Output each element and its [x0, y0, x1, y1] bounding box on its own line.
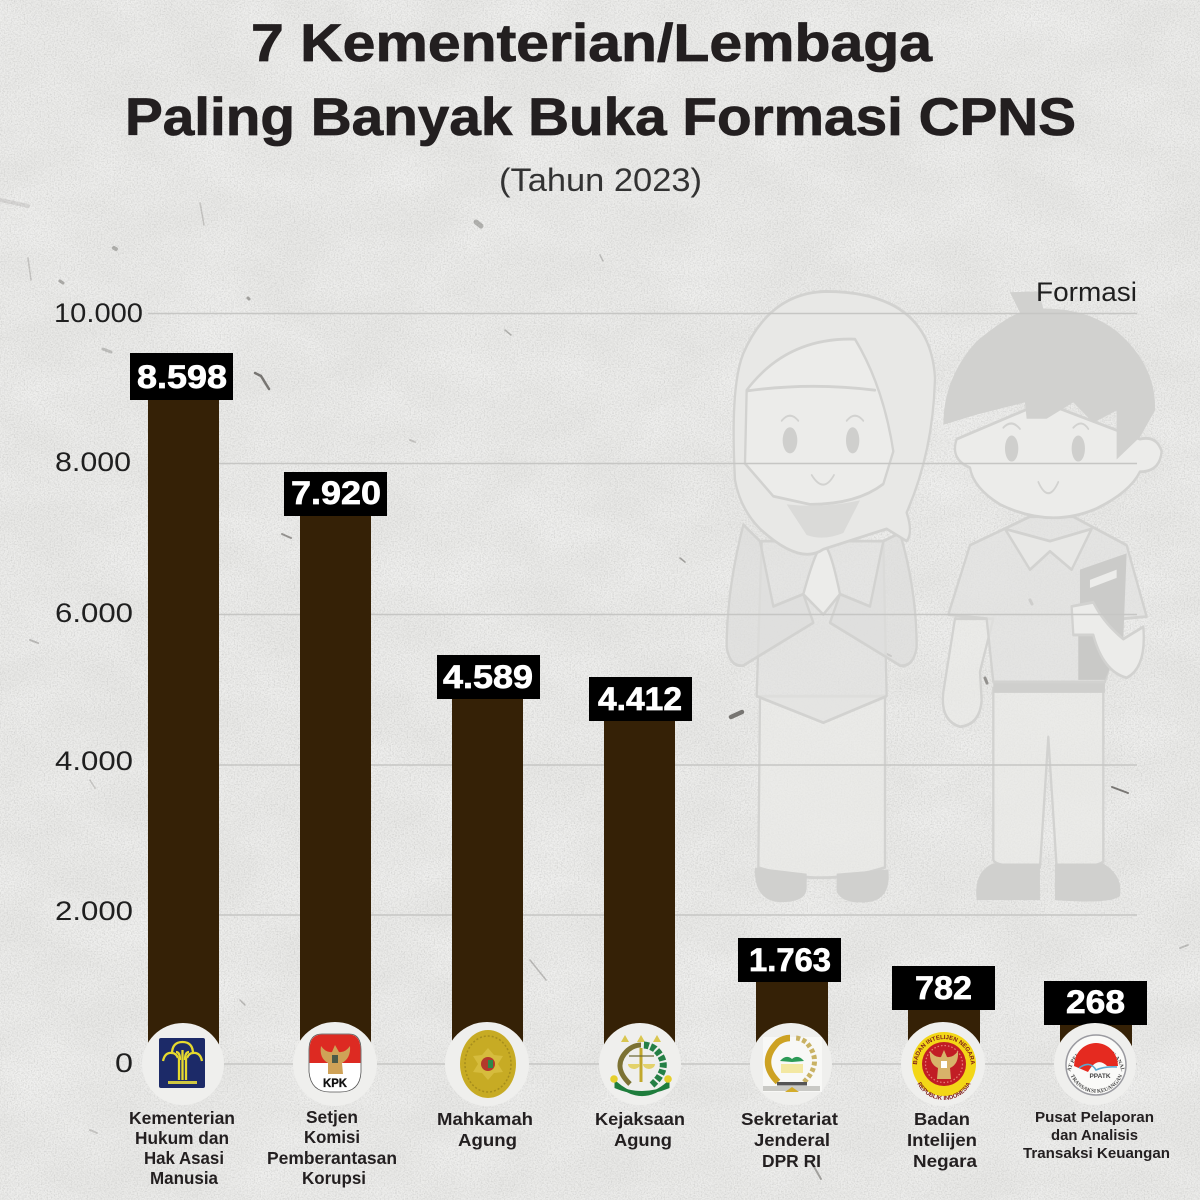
y axis labels: 6.000: [55, 598, 133, 628]
label: Setjen KPK: Setjen: [306, 1107, 358, 1127]
y axis labels: 2.000: [55, 896, 133, 926]
label: Kejaksaan Agung: Agung: [614, 1130, 672, 1150]
illustration: faded civil servant characters: [727, 291, 1162, 902]
title: [125, 14, 1076, 147]
logo: Mahkamah Agung: [460, 1030, 516, 1098]
label: Setjen KPK: [267, 1107, 397, 1188]
label: Sekretariat Jenderal DPR RI: [741, 1109, 838, 1171]
label: Mahkamah Agung: Agung: [458, 1130, 517, 1150]
logo: Badan Intelijen Negara: REPUBLIK INDONESIA: [918, 1082, 971, 1100]
logo: Kementerian Hukum dan HAM: [159, 1038, 205, 1088]
value labels: 4.412: [598, 681, 682, 717]
label: Kejaksaan Agung: [595, 1109, 685, 1150]
label: Badan Intelijen Negara: [907, 1109, 977, 1171]
y axis labels: 4.000: [55, 746, 133, 776]
label: Kementerian Hukum dan HAM: Hak Asasi: [144, 1148, 224, 1168]
label: Mahkamah Agung: [437, 1109, 533, 1150]
label: Badan Intelijen Negara: Badan: [914, 1109, 970, 1129]
y axis labels: 8.000: [55, 447, 131, 477]
logo: Badan Intelijen Negara: BADAN INTELIJEN NEGARA: [912, 1034, 975, 1065]
logo: PPATK: PPATK: [1089, 1073, 1111, 1080]
value labels: 1.763: [749, 942, 831, 978]
label: Sekretariat Jenderal DPR RI: DPR RI: [762, 1151, 821, 1171]
label: Setjen KPK: Korupsi: [302, 1168, 366, 1188]
label: Kementerian Hukum dan HAM: Hukum dan: [135, 1128, 229, 1148]
y axis labels: 10.000: [54, 298, 143, 328]
label: Kementerian Hukum dan HAM: [129, 1108, 235, 1188]
logo badges: [142, 1022, 1136, 1106]
character: girl in hijab: [727, 291, 935, 902]
title: Paling Banyak Buka Formasi CPNS: [125, 88, 1076, 147]
character: boy in uniform: [943, 291, 1162, 902]
logo: KPK: KPK: [323, 1078, 348, 1090]
value labels: 782: [915, 970, 972, 1006]
value labels: 4.589: [443, 659, 533, 695]
y axis unit label: Formasi: [1036, 277, 1137, 307]
value labels: 268: [1066, 984, 1125, 1020]
label: Setjen KPK: Komisi: [304, 1127, 360, 1147]
label: Sekretariat Jenderal DPR RI: Jenderal: [754, 1130, 830, 1150]
logo: PPATK: TRANSAKSI KEUANGAN: [1070, 1074, 1122, 1093]
label: PPATK: [1023, 1109, 1170, 1162]
chart gridlines: [148, 314, 1137, 1064]
label: Kementerian Hukum dan HAM: Manusia: [150, 1168, 218, 1188]
value labels: [130, 353, 1147, 1025]
subtitle: year: (Tahun 2023): [499, 162, 702, 198]
label: Setjen KPK: Pemberantasan: [267, 1148, 397, 1168]
logo: Sekretariat Jenderal DPR RI: [763, 1037, 822, 1092]
label: Mahkamah Agung: Mahkamah: [437, 1109, 533, 1129]
label: PPATK: dan Analisis: [1051, 1127, 1138, 1144]
bars: [148, 395, 1132, 1050]
value labels: 8.598: [137, 359, 227, 395]
label: Badan Intelijen Negara: Intelijen: [907, 1130, 977, 1150]
title: 7 Kementerian/Lembaga: [251, 14, 933, 73]
label: PPATK: Transaksi Keuangan: [1023, 1145, 1170, 1162]
value labels: 7.920: [291, 475, 381, 511]
y axis labels: 0: [115, 1048, 133, 1078]
logo: Kejaksaan Agung: [610, 1035, 672, 1094]
label: Sekretariat Jenderal DPR RI: Sekretariat: [741, 1109, 838, 1129]
label: PPATK: Pusat Pelaporan: [1035, 1109, 1154, 1126]
logo: KPK: [309, 1034, 361, 1092]
label: Kementerian Hukum dan HAM: Kementerian: [129, 1108, 235, 1128]
category labels: [129, 1107, 1170, 1188]
y axis labels: [54, 298, 143, 1078]
label: Badan Intelijen Negara: Negara: [913, 1151, 977, 1171]
logo: Badan Intelijen Negara: [912, 1032, 976, 1100]
label: Kejaksaan Agung: Kejaksaan: [595, 1109, 685, 1129]
logo: PPATK: PUSAT PELAPORAN DAN ANALISIS: [1067, 1051, 1124, 1072]
